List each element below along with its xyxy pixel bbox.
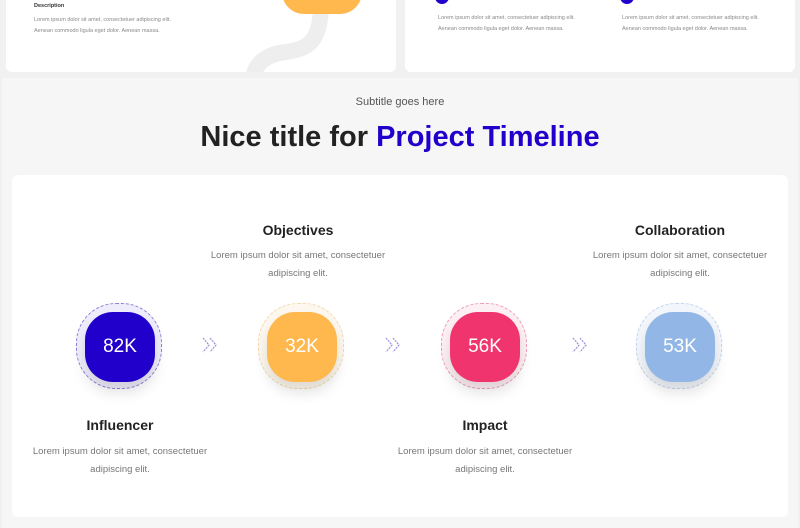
text: right card body 2: Lorem ipsum dolor sit amet, consectetuer adipiscing elit. [622,15,759,21]
text: Objectives: Lorem ipsum dolor sit amet, consectetuer [211,250,385,261]
icon: blue dot 1 [435,0,449,4]
node: 32K [258,303,344,396]
text: right card body 1: Lorem ipsum dolor sit amet, consectetuer adipiscing elit. [438,15,575,21]
text: right card body 2 [622,15,759,32]
node: 32K: 32K [285,336,319,357]
text: right card body 2: Aenean commodo ligula eget dolor. Aenean massa. [622,26,748,32]
text: Influencer: adipiscing elit. [90,464,150,475]
arrow 1 [202,338,217,352]
text: description body: Aenean commodo ligula eget dolor. Aenean massa. [34,28,160,34]
text: Influencer [33,446,207,475]
text: right card body 1: Aenean commodo ligula eget dolor. Aenean massa. [438,26,564,32]
arrow 2 [386,338,400,352]
heading: Impact: Impact [462,417,508,433]
icon: yellow blob [282,0,362,14]
text: Impact [398,446,572,475]
node: 53K [636,303,722,396]
heading: Collaboration: Collaboration [635,222,725,238]
panel: timeline [12,175,788,517]
text: Objectives [211,250,385,279]
text: Collaboration [593,250,767,279]
text: description body: Lorem ipsum dolor sit amet, consectetuer adipiscing elit. [34,17,171,23]
text: Influencer: Lorem ipsum dolor sit amet, consectetuer [33,446,207,457]
text: Collaboration: Lorem ipsum dolor sit amet, consectetuer [593,250,767,261]
node: 82K: 82K [103,336,137,357]
node: 56K [441,303,527,396]
text: Impact: Lorem ipsum dolor sit amet, consectetuer [398,446,572,457]
panel: top left card [6,0,396,72]
text: Objectives: adipiscing elit. [268,268,328,279]
arrow 3 [572,338,587,352]
text: Impact: adipiscing elit. [455,464,515,475]
text: description heading: Description [34,3,64,9]
decorative path [246,14,328,72]
node: 53K: 53K [663,336,697,357]
text: description body [34,17,171,34]
node: 56K: 56K [468,336,502,357]
subtitle: Subtitle goes here [356,96,444,108]
panel: top right card [405,0,795,72]
node: 82K [76,303,162,396]
title: Nice title for Project Timeline [200,121,600,153]
text: Collaboration: adipiscing elit. [650,268,710,279]
heading: Influencer: Influencer [87,417,153,433]
text: right card body 1 [438,15,575,32]
heading: Objectives: Objectives [263,222,333,238]
icon: blue dot 2 [620,0,634,4]
